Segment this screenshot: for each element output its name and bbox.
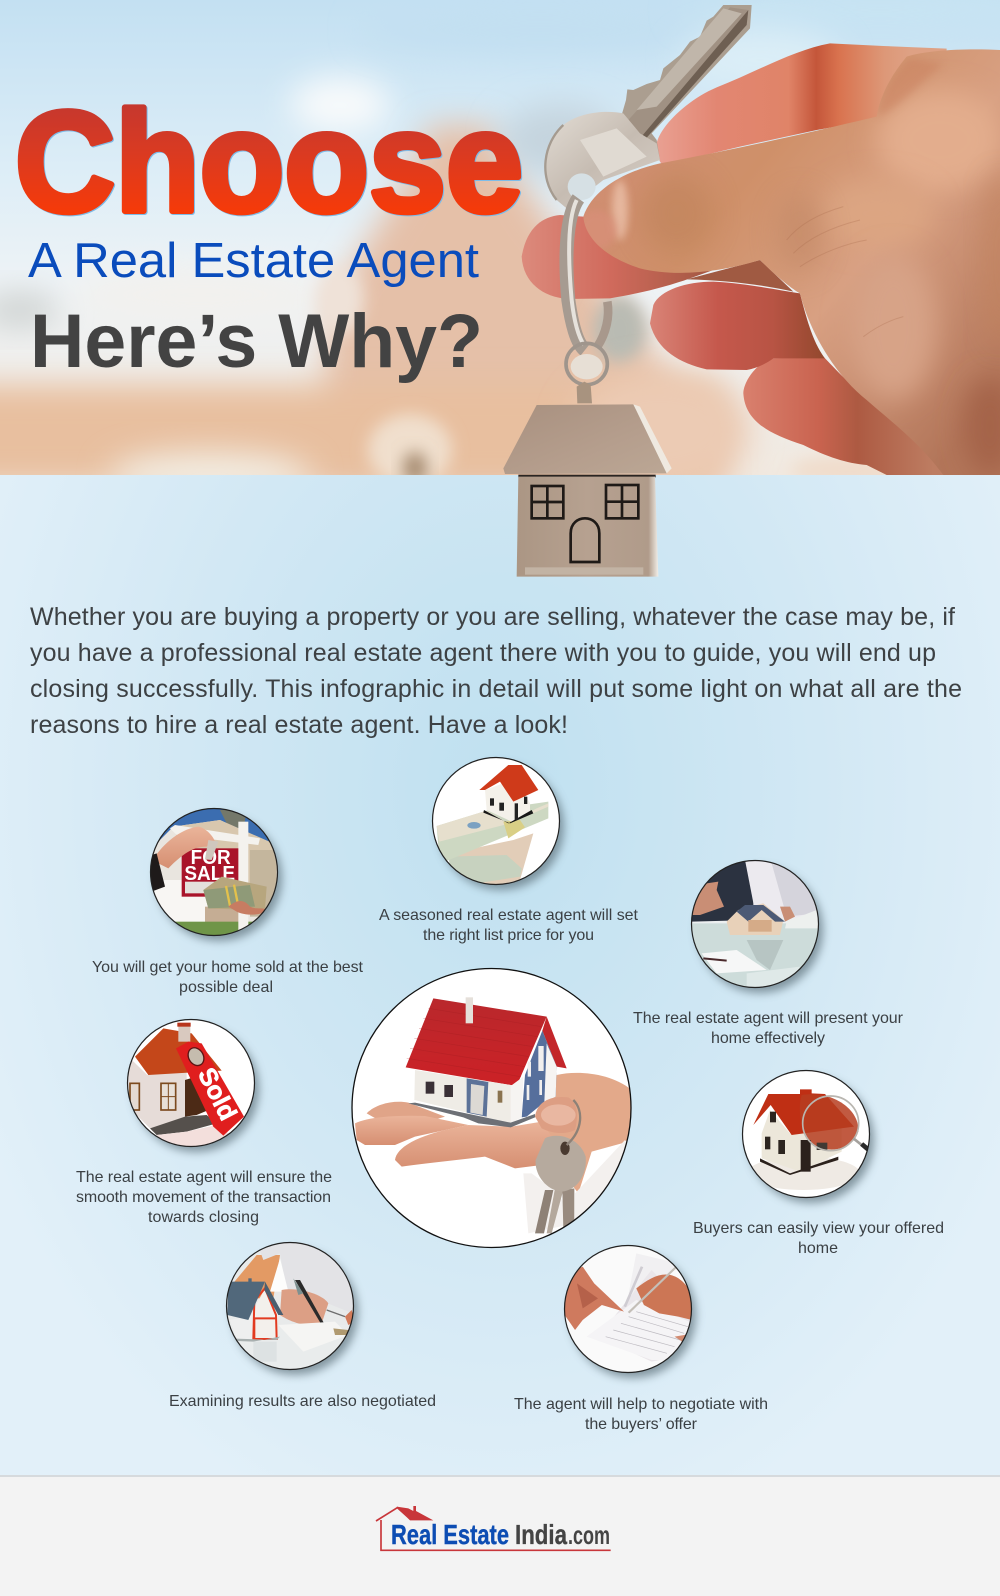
small connecting ring bbox=[566, 343, 607, 385]
index finger bbox=[657, 43, 947, 165]
central circle image: house on open palm with keys bbox=[352, 968, 638, 1248]
caption: right list price: the right list price for you bbox=[423, 927, 594, 944]
caption: right list price: A seasoned real estate agent will set bbox=[379, 907, 639, 924]
caption: smooth transaction: smooth movement of the transaction bbox=[76, 1189, 331, 1206]
caption: negotiate buyers offer: The agent will help to negotiate with bbox=[514, 1396, 768, 1413]
right hand behind house bbox=[548, 1072, 630, 1192]
title: Choose: Choose bbox=[15, 83, 523, 242]
caption: examining results: Examining results are also negotiated bbox=[169, 1393, 436, 1410]
caption: best possible deal: You will get your home sold at the best bbox=[92, 959, 364, 976]
caption: present home effectively: home effectively bbox=[711, 1030, 825, 1047]
hand holding key bbox=[522, 5, 1000, 477]
heading: A Real Estate Agent: A Real Estate Agent bbox=[28, 234, 479, 288]
caption: negotiate buyers offer: the buyers’ offer bbox=[585, 1416, 698, 1433]
hero photo: blurred building behind hand holding key bbox=[0, 0, 1000, 499]
caption: present home effectively bbox=[633, 1010, 904, 1047]
circle image: for sale sign: FOR bbox=[191, 846, 231, 869]
palm and thumb bbox=[583, 49, 1000, 475]
fingers under house bbox=[366, 1102, 445, 1119]
caption: present home effectively: The real estate agent will present your bbox=[633, 1010, 904, 1027]
caption: buyers view home: home bbox=[798, 1240, 838, 1257]
logo: Real Estate India.com: Real Estate bbox=[391, 1519, 509, 1550]
intro paragraph: Whether you are buying a property or you are selling, whatever the case may be, if bbox=[30, 603, 955, 631]
near band of split ring bbox=[566, 198, 585, 350]
middle finger bbox=[522, 215, 713, 299]
logo: Real Estate India.com bbox=[376, 1506, 611, 1550]
blurred background building bbox=[0, 0, 1000, 499]
logo: Real Estate India.com: .com bbox=[568, 1520, 610, 1550]
circle image: for sale sign bbox=[147, 807, 283, 940]
caption: best possible deal bbox=[92, 959, 364, 996]
model house roof bbox=[406, 998, 547, 1086]
circle image: sold tag on house bbox=[128, 1020, 254, 1148]
sky bbox=[0, 0, 1000, 475]
circle image: presenting home on glass table bbox=[690, 860, 820, 988]
logo: Real Estate India.com: India bbox=[515, 1519, 567, 1550]
caption: smooth transaction: towards closing bbox=[148, 1209, 259, 1226]
little finger bbox=[743, 357, 944, 475]
circle image: house under magnifying glass bbox=[742, 1070, 871, 1198]
footer band bbox=[0, 1475, 1000, 1596]
circle image: house on money bbox=[432, 758, 560, 887]
circle image: for sale sign: SALE bbox=[184, 863, 235, 885]
caption: negotiate buyers offer bbox=[514, 1396, 768, 1433]
caption: best possible deal: possible deal bbox=[179, 979, 273, 996]
caption: buyers view home: Buyers can easily view your offered bbox=[693, 1220, 944, 1237]
caption: right list price bbox=[379, 907, 639, 944]
circle image: sold tag on house: Sold bbox=[192, 1063, 242, 1125]
shadow between thumb and ring finger bbox=[687, 260, 793, 292]
circle shadows bbox=[133, 764, 874, 1378]
caption: smooth transaction bbox=[76, 1169, 332, 1226]
key bbox=[545, 5, 752, 208]
circle image: signing document with model house bbox=[225, 1242, 358, 1372]
keys bbox=[535, 1190, 553, 1233]
thumb over keys bbox=[535, 1097, 577, 1133]
heading: Here's Why?: Here’s Why? bbox=[30, 299, 483, 384]
far band of split ring bbox=[597, 302, 608, 347]
icon: house keychain bbox=[503, 343, 672, 577]
circle image: agent pointing at contract bbox=[564, 1246, 694, 1372]
intro paragraph: reasons to hire a real estate agent. Have a look! bbox=[30, 711, 568, 739]
ring finger bbox=[650, 282, 825, 370]
intro paragraph: closing successfully. This infographic in detail will put some light on what all are the bbox=[30, 675, 962, 703]
intro paragraph bbox=[30, 603, 962, 739]
caption: buyers view home bbox=[693, 1220, 944, 1257]
caption: smooth transaction: The real estate agent will ensure the bbox=[76, 1169, 332, 1186]
intro paragraph: you have a professional real estate agent there with you to guide, you will end up bbox=[30, 639, 936, 667]
